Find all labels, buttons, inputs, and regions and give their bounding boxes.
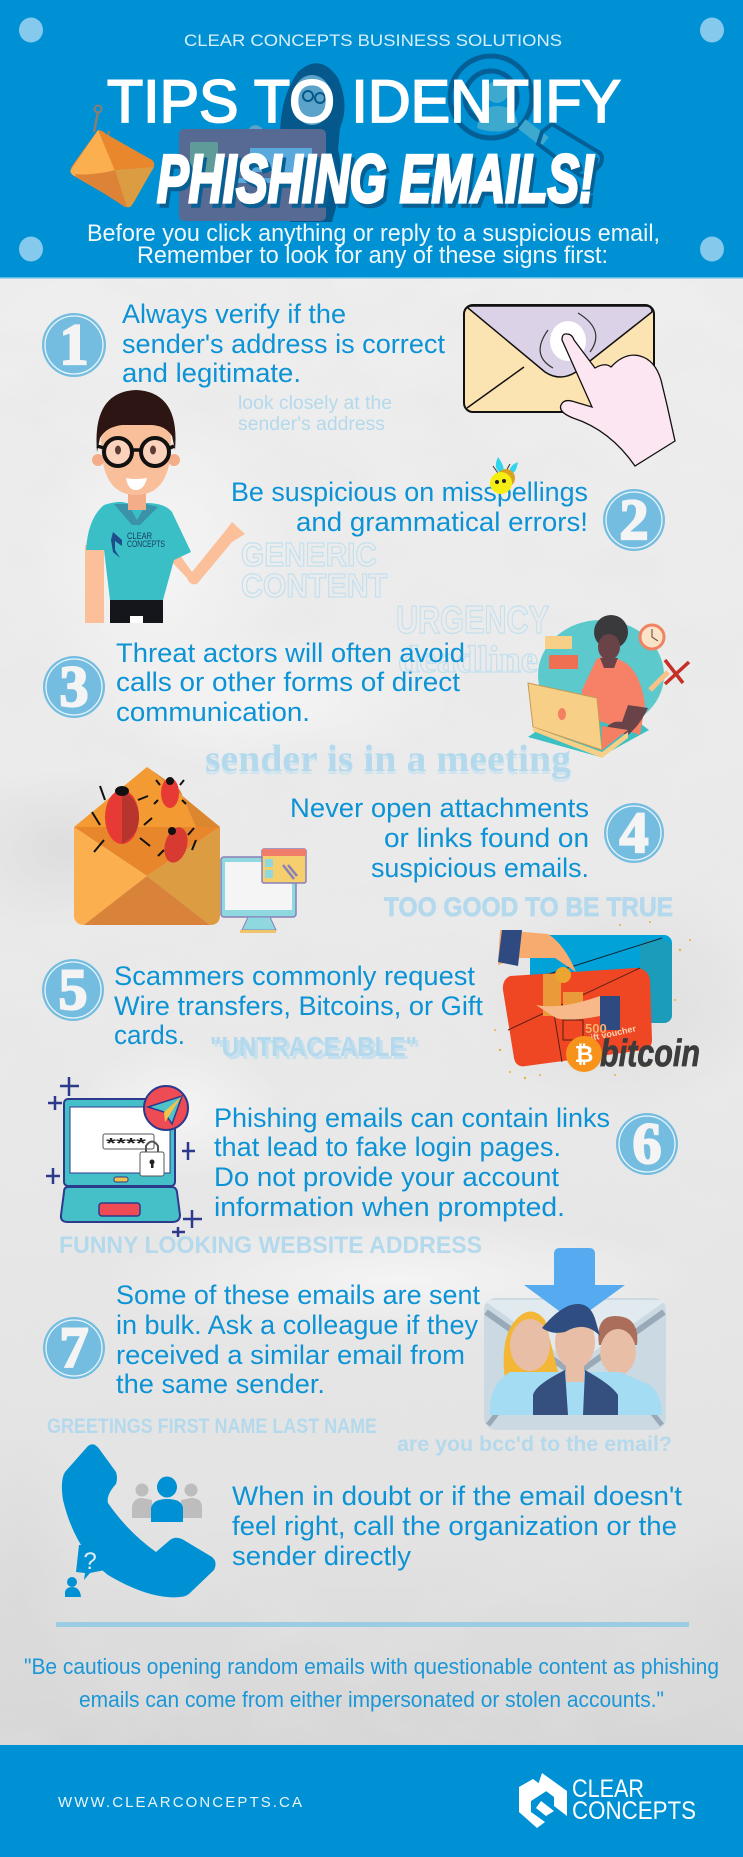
icon: hacker at laptop [179,63,345,222]
tip 4 text: suspicious emails. [371,853,589,883]
title line one: TIPS TO IDENTIFY [107,68,621,135]
bitcoin logo: bitcoin [600,1033,700,1075]
shirt logo: CONCEPTS [127,539,165,549]
tip 4 text: or links found on [384,823,589,853]
tip 3 text: Threat actors will often avoid [116,638,465,668]
tip 6 [46,1077,678,1259]
illustration: laptop with password [46,1077,202,1237]
tip 2 text [231,477,588,537]
intro text: Before you click anything or reply to a suspicious email, [87,220,660,247]
intro text [87,220,660,269]
decorative corner dots [19,18,724,262]
tip 7 text: in bulk. Ask a colleague if they [116,1310,478,1340]
bitcoin logo [566,1033,700,1075]
tip 1 text [122,299,445,388]
number badge 1: 1 [60,312,88,377]
note: look closely: look closely at the [238,393,392,414]
icon: question bubble and person [65,1545,105,1597]
tip 6 text: Phishing emails can contain links [214,1103,610,1133]
tip 4 text [290,793,589,883]
number badge 6: 6 [632,1111,662,1176]
bcc label: are you bcc'd to the email? [397,1433,672,1456]
number badge 5: 5 [58,957,88,1022]
tip 1 text: and legitimate. [122,358,301,388]
icon: telephone handset [62,1444,216,1597]
tip 6 text: Do not provide your account [214,1162,560,1192]
number badge 4 [604,800,664,865]
logo wordmark [572,1775,696,1825]
number badge 5 [42,957,104,1022]
plus marks [46,1077,202,1237]
tip 6 text: that lead to fake login pages. [214,1132,561,1162]
tip 3 [43,615,689,783]
tip 5 text [114,961,483,1050]
number badge 7: 7 [60,1315,88,1380]
tip 5 [42,921,700,1079]
intro text: Remember to look for any of these signs first: [137,242,608,269]
icon: orange envelope on hook [70,106,154,207]
tip 1 text: sender's address is correct [122,329,445,359]
tip 4 [74,767,673,933]
number badge 2: 2 [620,487,648,552]
tip 6 text: information when prompted. [214,1192,565,1222]
tip 3 text: communication. [116,697,310,727]
illustration: people in envelope with arrow [484,1248,666,1430]
website: WWW.CLEARCONCEPTS.CA [58,1794,302,1811]
tip 5 text: Scammers commonly request [114,961,475,991]
header banner [0,0,743,278]
footer band [0,1745,743,1857]
tip 7 text: received a similar email from [116,1340,465,1370]
icon: magnifying glass [450,56,602,177]
tip 2 [231,457,665,552]
logo wordmark: CONCEPTS [572,1797,696,1825]
closing quote: emails can come from either impersonated or stolen accounts." [79,1687,664,1712]
tip 7 [43,1248,672,1456]
icon: bee [490,457,518,494]
closing quote [24,1654,719,1712]
note: look closely [238,393,392,435]
generic content label: GENERIC [241,536,377,573]
deadline label: deadline [398,639,538,681]
number badge 2 [603,487,665,552]
tip 4 text: Never open attachments [290,793,589,823]
icon: question bubble and person: ? [83,1548,97,1575]
note: look closely: sender's address [238,414,385,435]
gold speckles [494,921,691,1079]
illustration: laptop with password: **** [106,1135,146,1152]
too good label: TOO GOOD TO BE TRUE [384,892,673,922]
tip 6 text [214,1103,610,1222]
logo [519,1773,696,1828]
tip 8 text: sender directly [232,1541,411,1571]
icon: envelope with pointing hand [464,305,675,466]
number badge 6 [616,1111,678,1176]
tip 7 text: the same sender. [116,1369,325,1399]
eyebrow text: CLEAR CONCEPTS BUSINESS SOLUTIONS [184,31,562,50]
number badge 1 [42,312,106,377]
logo wordmark: CLEAR [572,1775,644,1803]
tip 8 text: feel right, call the organization or the [232,1511,677,1541]
urgency label: URGENCY [396,599,549,642]
closing quote: "Be cautious opening random emails with questionable content as phishing [24,1654,719,1679]
tip 5 text: Wire transfers, Bitcoins, or Gift [114,991,483,1021]
icon: group of people [132,1476,202,1522]
tip 8 [62,1444,683,1597]
tip 1 text: Always verify if the [122,299,346,329]
tip 3 text: calls or other forms of direct [116,667,460,697]
illustration: gift voucher and bitcoin: gift voucher [584,1023,637,1044]
funny website label: FUNNY LOOKING WEBSITE ADDRESS [59,1232,482,1259]
generic content label: CONTENT [241,567,387,604]
tip 1 [42,299,675,466]
bitcoin logo: ₿ [575,1041,593,1067]
character in teal shirt [85,390,245,623]
illustration: gift voucher and bitcoin: 500 [585,1021,607,1036]
tip 7 text: Some of these emails are sent [116,1280,480,1310]
shirt logo [111,531,165,558]
number badge 3: 3 [60,654,88,719]
number badge 3 [43,654,105,719]
illustration: woman at laptop [528,615,689,758]
tip 8 text [232,1481,683,1571]
tip 7 text [116,1280,480,1399]
tip 5 text: cards. [114,1020,185,1050]
illustration: envelope with bugs [74,767,220,925]
meeting label: sender is in a meeting [205,738,571,780]
illustration: gift voucher and bitcoin [494,921,700,1079]
untraceable label: "UNTRACEABLE" [213,1034,420,1065]
tip 8 text: When in doubt or if the email doesn't [232,1481,683,1511]
generic content label [241,536,387,604]
number badge 7 [43,1315,105,1380]
shirt logo: CLEAR [127,531,152,541]
untraceable label: "UNTRACEABLE" [210,1031,417,1062]
tip 2 text: and grammatical errors! [296,507,588,537]
meeting label: sender is in a meeting [205,741,571,783]
greetings label: GREETINGS FIRST NAME LAST NAME [47,1415,377,1438]
icon: monitor with link window [221,849,306,933]
tip 2 text: Be suspicious on misspellings [231,477,588,507]
tip 3 text [116,638,465,727]
number badge 4: 4 [620,800,648,865]
